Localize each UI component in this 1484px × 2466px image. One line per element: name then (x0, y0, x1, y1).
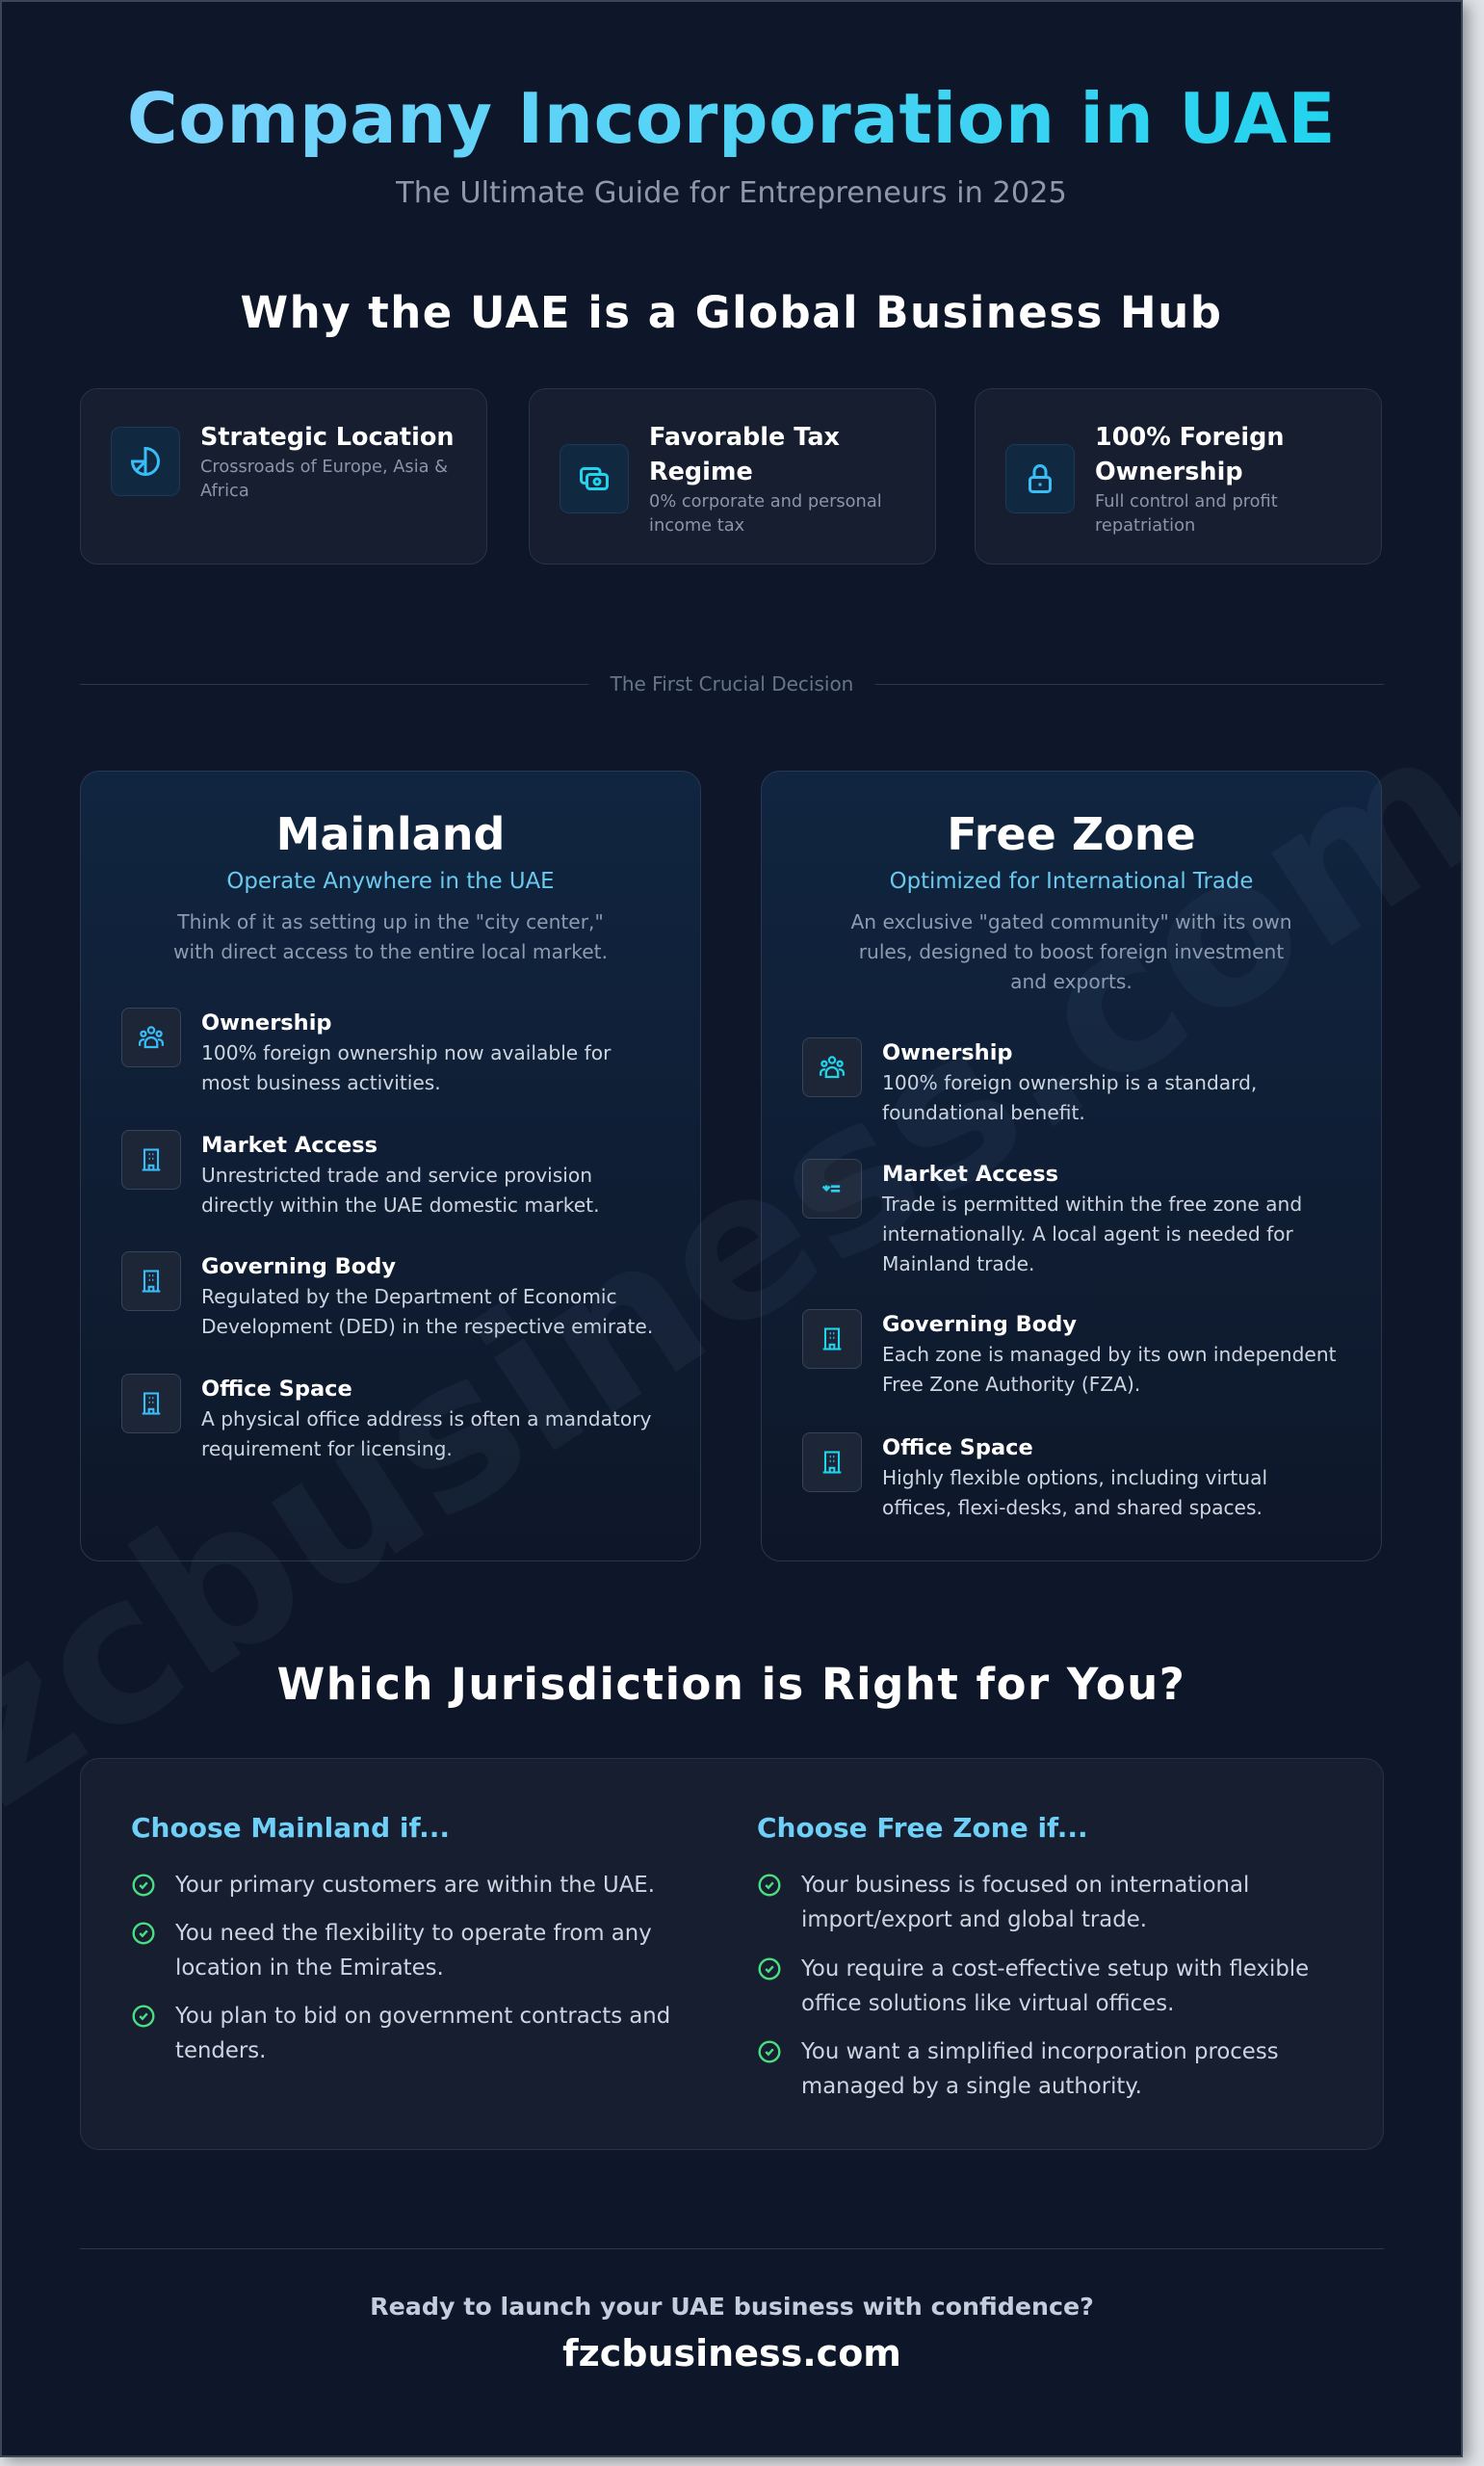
item: ownership: 100% foreign ownership now available for (201, 1041, 611, 1064)
item: market access: internationally. A local agent is needed for (882, 1222, 1293, 1246)
item: market access (121, 1130, 600, 1217)
item: governing body: Governing Body (882, 1312, 1077, 1337)
title: Company Incorporation in UAE (127, 78, 1336, 159)
panel: free zone: Free Zone (947, 808, 1196, 860)
item: market access: Mainland trade. (882, 1252, 1034, 1275)
item: ownership (121, 1008, 611, 1094)
card: foreign ownership: Ownership (1095, 458, 1243, 486)
column: choose free zone: You require a cost-effective setup with flexible (801, 1956, 1309, 1981)
heading: why UAE: Why the UAE is a Global Business Hub (241, 287, 1222, 338)
item: governing body: Regulated by the Department of Economic (201, 1285, 617, 1308)
footer (80, 2248, 1384, 2374)
item: office space: A physical office address is often a mandatory (201, 1407, 651, 1430)
item: governing body (121, 1251, 653, 1338)
column: choose free zone (757, 1812, 1309, 2099)
panel: free zone: An exclusive "gated community" with its own (850, 910, 1292, 933)
card: tax regime: income tax (649, 515, 744, 536)
card: foreign ownership: 100% Foreign (1095, 423, 1285, 452)
column: choose mainland: Choose Mainland if... (131, 1812, 450, 1844)
divider: first crucial decision: The First Crucial Decision (611, 672, 853, 695)
item: office space (802, 1432, 1267, 1519)
card: strategic location (80, 388, 487, 564)
panel: free zone: rules, designed to boost foreign investment (859, 940, 1284, 963)
item: ownership: foundational benefit. (882, 1101, 1085, 1124)
card: tax regime (529, 388, 936, 564)
item: office space (121, 1374, 651, 1460)
panel: mainland: Mainland (276, 808, 505, 860)
item: market access: Unrestricted trade and service provision (201, 1164, 592, 1187)
panel: mainland: Think of it as setting up in the "city center," (177, 910, 604, 933)
panel: free zone (761, 771, 1382, 1561)
footer: call to action: Ready to launch your UAE business with confidence? (370, 2293, 1094, 2321)
panel: mainland: Operate Anywhere in the UAE (226, 869, 555, 894)
card: foreign ownership (975, 388, 1382, 564)
card: strategic location: Crossroads of Europe, Asia & (200, 457, 448, 477)
heading: which jurisdiction: Which Jurisdiction is Right for You? (277, 1659, 1185, 1710)
card: foreign ownership: repatriation (1095, 515, 1195, 536)
card: tax regime: Favorable Tax (649, 423, 840, 452)
item: market access: directly within the UAE domestic market. (201, 1194, 600, 1217)
column: choose free zone: Your business is focused on international (801, 1873, 1249, 1898)
panel: mainland: with direct access to the entire local market. (173, 940, 608, 963)
card: tax regime: 0% corporate and personal (649, 491, 882, 512)
item: market access: Market Access (882, 1162, 1058, 1187)
item: governing body: Free Zone Authority (FZA). (882, 1373, 1140, 1396)
card: tax regime: Regime (649, 458, 753, 486)
panel: decision checklist (80, 1758, 1384, 2150)
item: market access: Market Access (201, 1133, 378, 1158)
footer: domain: fzcbusiness.com (562, 2332, 901, 2374)
item: office space: Office Space (201, 1377, 352, 1402)
column: choose free zone: You want a simplified incorporation process (801, 2039, 1279, 2064)
column: choose free zone: import/export and global trade. (801, 1907, 1147, 1932)
column: choose mainland (131, 1812, 670, 2063)
icon: lock (1005, 444, 1075, 513)
item: ownership: 100% foreign ownership is a standard, (882, 1071, 1257, 1094)
item: governing body: Governing Body (201, 1254, 396, 1279)
panel: free zone: Optimized for International Trade (890, 869, 1253, 894)
column: choose mainland: tenders. (175, 2038, 266, 2063)
icon: globe (111, 427, 180, 496)
item: governing body: Development (DED) in the respective emirate. (201, 1315, 653, 1338)
card: foreign ownership: Full control and profit (1095, 491, 1278, 512)
item: ownership: Ownership (882, 1040, 1013, 1065)
item: office space: requirement for licensing. (201, 1437, 453, 1460)
subtitle: The Ultimate Guide for Entrepreneurs in 2025 (396, 176, 1067, 210)
item: market access (802, 1159, 1302, 1275)
card: strategic location: Strategic Location (200, 423, 455, 452)
panel: mainland (80, 771, 701, 1561)
column: choose mainland: Your primary customers are within the UAE. (175, 1873, 655, 1898)
column: choose mainland: location in the Emirates. (175, 1955, 444, 1981)
column: choose free zone: Choose Free Zone if... (757, 1812, 1088, 1844)
column: choose free zone: managed by a single authority. (801, 2074, 1142, 2099)
item: office space: offices, flexi-desks, and shared spaces. (882, 1496, 1263, 1519)
icon: money (560, 444, 629, 513)
item: governing body: Each zone is managed by its own independent (882, 1343, 1337, 1366)
item: ownership: most business activities. (201, 1071, 441, 1094)
item: market access: Trade is permitted within the free zone and (882, 1193, 1302, 1216)
item: governing body (802, 1309, 1337, 1396)
column: choose mainland: You plan to bid on government contracts and (175, 2004, 670, 2029)
item: ownership: Ownership (201, 1010, 332, 1036)
column: choose mainland: You need the flexibility to operate from any (175, 1921, 652, 1946)
item: office space: Highly flexible options, including virtual (882, 1466, 1267, 1489)
panel: free zone: and exports. (1010, 970, 1133, 993)
card: strategic location: Africa (200, 481, 249, 501)
item: office space: Office Space (882, 1435, 1033, 1460)
item: ownership (802, 1037, 1257, 1124)
column: choose free zone: office solutions like virtual offices. (801, 1991, 1174, 2016)
